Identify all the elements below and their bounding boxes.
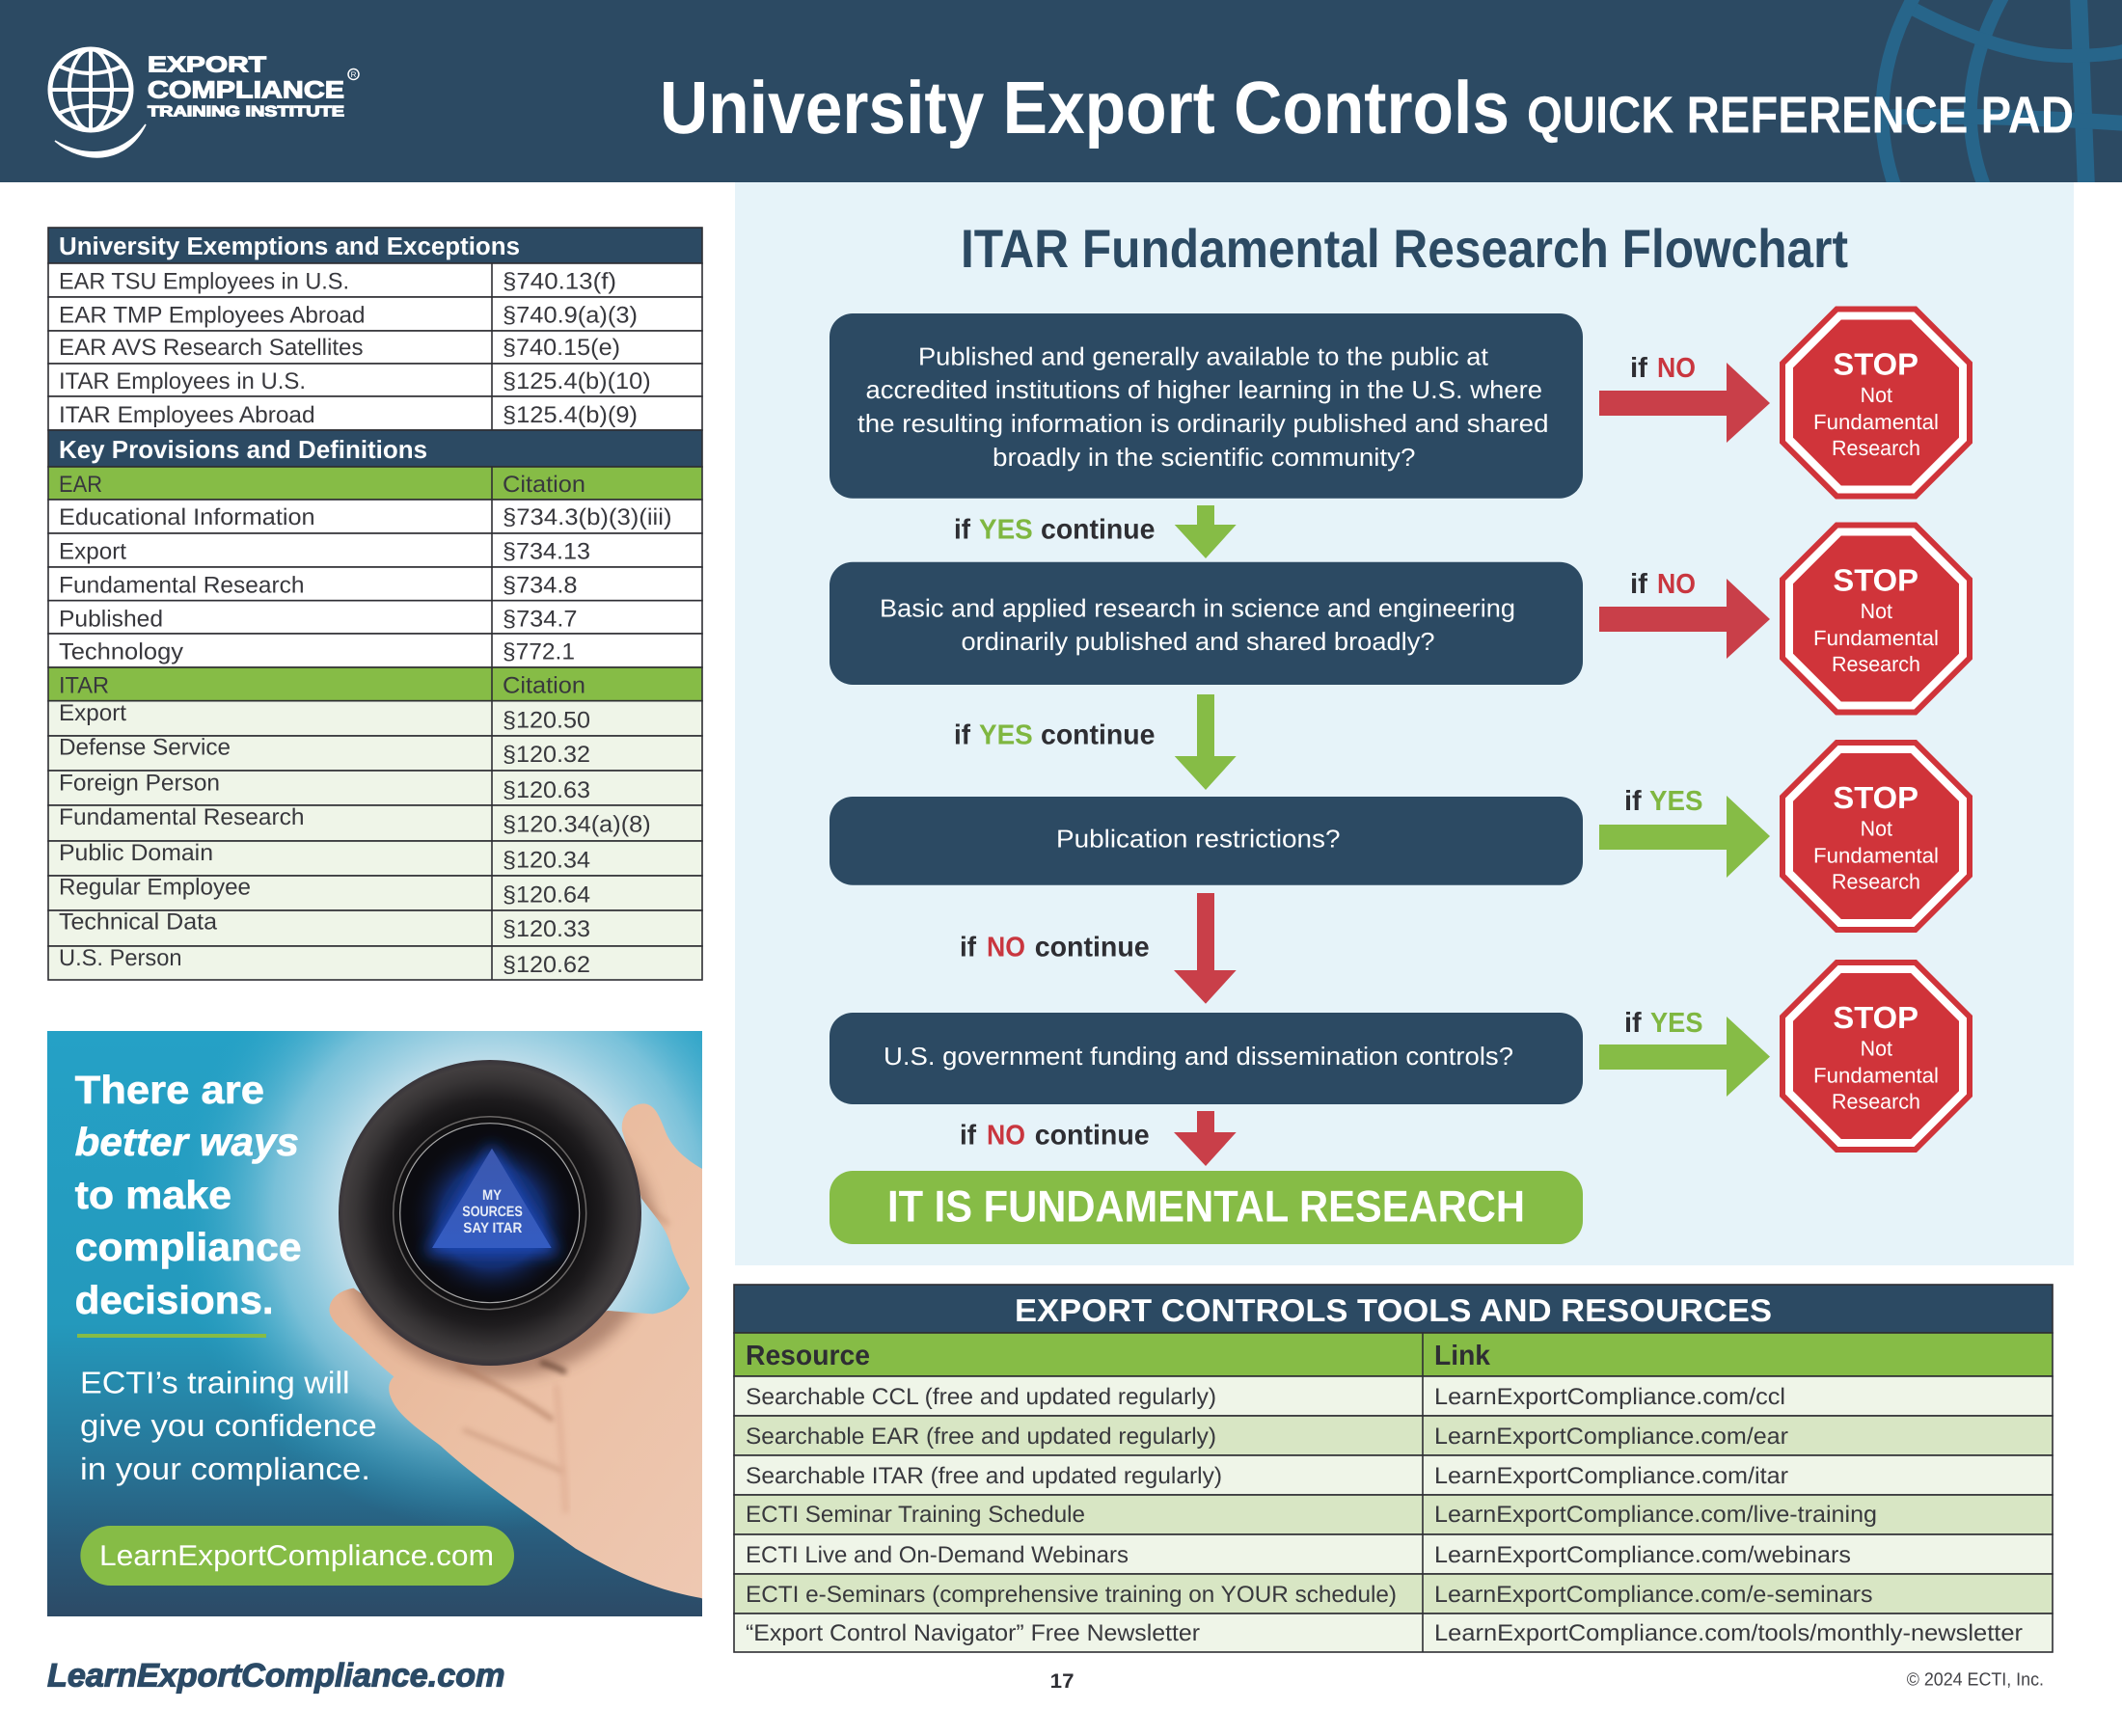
label: if NO: NO [1657, 353, 1696, 384]
row: ITAR Employees Abroad [59, 402, 315, 428]
copyright: © 2024 ECTI, Inc. [1907, 1670, 2044, 1691]
row: LearnExportCompliance.com/tools/monthly-newsletter [1434, 1620, 2023, 1646]
arrow: green right 1 [1599, 796, 1770, 878]
row [48, 634, 702, 667]
stop sign 1: Fundamental [1813, 410, 1939, 434]
row: LearnExportCompliance.com/ccl [1434, 1384, 1785, 1410]
question box 2: Basic and applied research in science and engineering [880, 594, 1515, 623]
question box 1 [830, 313, 1583, 499]
row [734, 1614, 2053, 1652]
footer: website logotype: LearnExportCompliance.com [47, 1658, 505, 1695]
row: Educational Information [59, 504, 315, 530]
question box 1: accredited institutions of higher learning in the U.S. where [866, 375, 1542, 404]
ad body text [80, 1366, 377, 1486]
row: “Export Control Navigator” Free Newsletter [746, 1620, 1200, 1646]
row: §125.4(b)(9) [503, 402, 638, 428]
row: ECTI Seminar Training Schedule [746, 1502, 1085, 1528]
row: LearnExportCompliance.com/live-training [1434, 1502, 1877, 1528]
stop sign 3 [1780, 740, 1972, 933]
row [734, 1455, 2053, 1495]
row [48, 770, 702, 805]
table heading: Key Provisions and Definitions: Key Provisions and Definitions [59, 435, 427, 464]
label: if NO continue: NO [987, 1121, 1025, 1152]
stop sign 2: Research [1832, 652, 1920, 676]
row [48, 601, 702, 634]
stop sign 4: Not [1861, 1036, 1892, 1061]
label: if YES continue: if [954, 720, 970, 751]
row [734, 1534, 2053, 1574]
row [48, 263, 702, 297]
row: EAR TMP Employees Abroad [59, 302, 365, 328]
row: Fundamental Research [59, 804, 305, 830]
row: Export [59, 700, 126, 726]
label: if YES: YES [1649, 786, 1703, 817]
question box 1: Published and generally available to the public at [918, 341, 1489, 370]
row [734, 1574, 2053, 1614]
row [48, 804, 702, 841]
label: if NO continue: continue [1035, 933, 1150, 963]
EAR subheader row: EAR [59, 472, 102, 498]
stop sign 3: Fundamental [1813, 843, 1939, 868]
stop sign 2: Fundamental [1813, 626, 1939, 650]
table heading: Key Provisions and Definitions [48, 430, 702, 467]
label: if NO continue: NO [987, 933, 1025, 963]
column headers: Resource [746, 1341, 870, 1371]
flowchart heading: ITAR Fundamental Research Flowchart [961, 218, 1848, 279]
row [48, 364, 702, 396]
arrow: green down 2 [1175, 694, 1237, 790]
illustration: magic 8 ball [339, 1060, 641, 1366]
row [48, 874, 702, 910]
row [48, 700, 702, 736]
row: Technology [59, 638, 183, 665]
label: if YES continue: continue [1041, 515, 1156, 546]
column headers: Link [1434, 1341, 1491, 1371]
row: §120.62 [503, 952, 590, 978]
question box 3: Publication restrictions? [1056, 824, 1341, 853]
ad URL button [80, 1526, 514, 1586]
arrow: red down 2 [1174, 1111, 1237, 1166]
label: if NO continue [960, 1121, 1150, 1152]
row: §734.8 [503, 572, 577, 598]
stop sign 2 [1780, 523, 1972, 716]
label: if YES continue [954, 515, 1156, 546]
label: if YES: YES [1650, 1008, 1703, 1039]
ad body text: ECTI’s training will [80, 1366, 350, 1400]
logo text: company name: EXPORT [148, 52, 266, 77]
row: U.S. Person [59, 945, 181, 971]
label: if NO: if [1630, 353, 1647, 384]
icon: blue triangle [432, 1149, 552, 1248]
row: Public Domain [59, 840, 213, 866]
label: if NO continue: if [960, 933, 976, 963]
row [48, 734, 702, 771]
row [734, 1495, 2053, 1534]
row: §120.63 [503, 777, 590, 803]
row: LearnExportCompliance.com/ear [1434, 1424, 1788, 1450]
question box 1: the resulting information is ordinarily published and shared [857, 409, 1549, 438]
ad body text: give you confidence [80, 1408, 377, 1443]
row: §740.15(e) [503, 335, 620, 361]
stop sign 3: Not [1861, 816, 1892, 841]
ITAR subheader row [48, 667, 702, 701]
EAR subheader row [48, 467, 702, 500]
row: §120.32 [503, 742, 590, 768]
row [48, 909, 702, 946]
ad accent line [77, 1334, 266, 1338]
row: §120.64 [503, 882, 590, 908]
row: §120.33 [503, 916, 590, 942]
panel: tools and resources table [734, 1285, 2053, 1652]
ITAR subheader row: ITAR [59, 672, 109, 698]
row: §772.1 [503, 638, 575, 665]
arrow: green down 1 [1175, 505, 1237, 558]
row: Searchable ITAR (free and updated regularly) [746, 1463, 1222, 1489]
stop sign 4 [1780, 960, 1972, 1153]
row: Fundamental Research [59, 572, 305, 598]
ad body text: in your compliance. [80, 1451, 370, 1486]
question box 2 [830, 562, 1583, 685]
label: if YES [1624, 1008, 1703, 1039]
row: Searchable CCL (free and updated regularly) [746, 1384, 1216, 1410]
stop sign 3: Research [1832, 870, 1920, 894]
row: EAR AVS Research Satellites [59, 335, 363, 361]
panel: flowchart [735, 182, 2074, 1265]
question box 2: ordinarily published and shared broadly? [961, 627, 1435, 656]
stop sign 1: Not [1861, 383, 1892, 407]
ad headline [75, 1068, 302, 1322]
label: if YES [1624, 786, 1703, 817]
row [48, 840, 702, 876]
label: if NO [1630, 569, 1696, 600]
illustration: hand [329, 1096, 704, 1600]
stop sign 4: STOP [1833, 1000, 1918, 1035]
row: §120.34 [503, 847, 590, 873]
panel: exemptions and definitions table [48, 228, 702, 980]
stop sign 4: Research [1832, 1090, 1920, 1114]
row: ECTI Live and On-Demand Webinars [746, 1542, 1129, 1568]
title: University Export Controls [660, 67, 1510, 149]
label: if YES: if [1624, 786, 1642, 817]
question box 4: U.S. government funding and dissemination controls? [884, 1042, 1513, 1071]
row: Published [59, 606, 163, 632]
ball message: MY [482, 1187, 502, 1204]
ad URL button: LearnExportCompliance.com [99, 1540, 494, 1572]
row: §734.3(b)(3)(iii) [503, 504, 671, 530]
row: EAR TSU Employees in U.S. [59, 268, 349, 294]
row [48, 533, 702, 567]
icon: logo globe [50, 49, 131, 130]
ad headline: compliance [75, 1225, 302, 1269]
label: if YES continue [954, 720, 1156, 751]
table heading: University Exemptions and Exceptions: University Exemptions and Exceptions [59, 231, 520, 260]
ball message: SAY ITAR [463, 1220, 522, 1236]
row [48, 945, 702, 980]
logo registered mark: R [351, 70, 357, 79]
row: §740.13(f) [503, 268, 616, 294]
row [48, 567, 702, 601]
stop sign 1 [1780, 307, 1972, 500]
icon: logo swoosh [55, 124, 146, 157]
row: §120.34(a)(8) [503, 811, 651, 837]
panel: advertisement [47, 1031, 704, 1616]
column headers [734, 1333, 2053, 1376]
stop sign 2: STOP [1833, 562, 1918, 597]
stop sign 1: Research [1832, 436, 1920, 460]
ITAR subheader row: Citation [503, 672, 585, 698]
row: LearnExportCompliance.com/itar [1434, 1463, 1788, 1489]
label: if YES continue: YES [979, 515, 1033, 546]
stop sign 1: STOP [1833, 346, 1918, 381]
row: Foreign Person [59, 770, 220, 796]
label: if NO: NO [1657, 569, 1696, 600]
row: §734.13 [503, 538, 590, 564]
row: Searchable EAR (free and updated regularly) [746, 1424, 1216, 1450]
label: if YES: if [1624, 1008, 1642, 1039]
ad headline: decisions. [75, 1278, 274, 1322]
question box 1: broadly in the scientific community? [993, 443, 1416, 472]
logo text: company name: COMPLIANCE [148, 77, 344, 104]
row: ITAR Employees in U.S. [59, 368, 306, 394]
row: Regular Employee [59, 874, 251, 900]
arrow: red right 2 [1599, 579, 1770, 659]
row [734, 1416, 2053, 1455]
arrow: red down 1 [1174, 893, 1237, 1004]
ad headline: better ways [75, 1120, 299, 1164]
ball message [463, 1190, 523, 1233]
row [48, 396, 702, 430]
arrow: green right 2 [1599, 1017, 1770, 1097]
row: Export [59, 538, 126, 564]
row: §740.9(a)(3) [503, 302, 638, 328]
label: if NO: if [1630, 569, 1647, 600]
label: if YES continue: YES [979, 720, 1033, 751]
row [48, 500, 702, 533]
row: §120.50 [503, 707, 590, 733]
stop sign 3: STOP [1833, 780, 1918, 815]
ball message: SOURCES [462, 1204, 523, 1220]
label: if YES continue: continue [1041, 720, 1156, 751]
EAR subheader row: Citation [503, 472, 585, 498]
row [48, 331, 702, 364]
label: if YES continue: if [954, 515, 970, 546]
row: Technical Data [59, 909, 218, 935]
label: if NO continue: continue [1035, 1121, 1150, 1152]
label: if NO continue [960, 933, 1150, 963]
row [734, 1376, 2053, 1416]
label: if NO [1630, 353, 1696, 384]
result box [830, 1171, 1583, 1244]
logo text: company name [148, 52, 344, 120]
ad headline: There are [75, 1068, 264, 1112]
arrow: red right 1 [1599, 363, 1770, 443]
row [48, 297, 702, 331]
question box 4 [830, 1013, 1583, 1104]
result box: IT IS FUNDAMENTAL RESEARCH [887, 1181, 1525, 1232]
logo registered mark [348, 69, 359, 79]
table heading [734, 1285, 2053, 1333]
row: LearnExportCompliance.com/e-seminars [1434, 1582, 1873, 1608]
stop sign 2: Not [1861, 599, 1892, 623]
page number: 17 [1050, 1670, 1075, 1693]
table heading: University Exemptions and Exceptions [48, 228, 702, 263]
stop sign 4: Fundamental [1813, 1063, 1939, 1088]
label: if NO continue: if [960, 1121, 976, 1152]
question box 3 [830, 797, 1583, 885]
row: §734.7 [503, 606, 577, 632]
icon: background globe watermark [1876, 0, 2122, 188]
row: Defense Service [59, 734, 231, 760]
row: LearnExportCompliance.com/webinars [1434, 1542, 1851, 1568]
table heading: EXPORT CONTROLS TOOLS AND RESOURCES [1015, 1292, 1772, 1328]
logo text: company name: TRAINING INSTITUTE [148, 104, 344, 120]
row: ECTI e-Seminars (comprehensive training on YOUR schedule) [746, 1582, 1397, 1608]
panel: header band [0, 0, 2122, 188]
ad headline: to make [75, 1173, 231, 1217]
row: §125.4(b)(10) [503, 368, 651, 394]
